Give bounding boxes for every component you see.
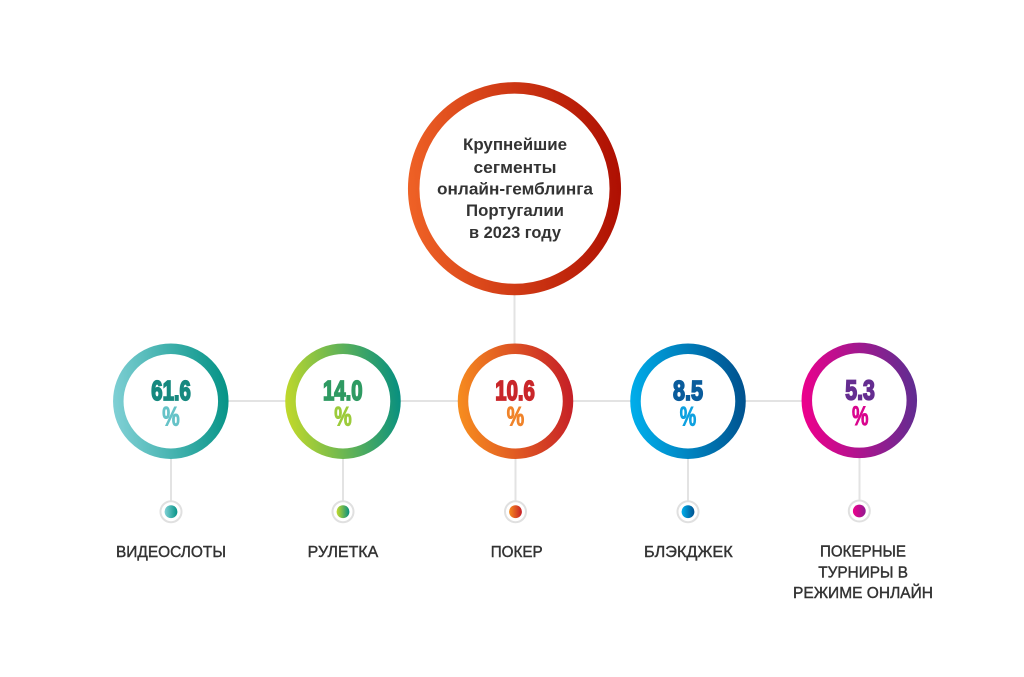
segment: блэкджек [636,349,740,561]
marker dot [678,501,698,522]
segment: покер [463,349,568,561]
label: ВИДЕОСЛОТЫ [116,544,226,561]
percent sign: % [680,402,696,432]
title text: в 2023 году [469,224,562,242]
title text [437,136,594,242]
central title circle [414,88,615,290]
percent sign: % [334,402,352,432]
segment: видеослоты [116,349,226,561]
title text: Крупнейшие [463,136,567,154]
segment: рулетка [290,349,396,561]
marker dot [505,501,526,522]
segment: покерные турниры в режиме онлайн [793,348,933,602]
label: БЛЭКДЖЕК [644,544,733,561]
percent sign: % [852,401,868,431]
label: ТУРНИРЫ В [818,564,908,581]
ring 8.5% [636,349,740,454]
connector lines [170,294,860,501]
label: ПОКЕРНЫЕ [820,544,906,561]
label: РЕЖИМЕ ОНЛАЙН [793,584,933,602]
title text: Португалии [466,202,564,220]
value 61.6: 61.6 [151,375,191,406]
label: РУЛЕТКА [308,544,379,561]
ring 14.0% [290,349,396,454]
label: ПОКЕР [491,544,543,561]
ring 10.6% [463,349,568,454]
ring 61.6% [118,349,223,454]
title text: онлайн-гемблинга [437,180,594,198]
marker dot [160,501,182,522]
marker dot [849,500,870,522]
marker dot [332,501,354,522]
percent sign: % [507,402,524,432]
ring 5.3% [807,348,912,453]
title text: сегменты [474,159,556,177]
percent sign: % [162,402,180,432]
value 10.6: 10.6 [495,375,535,406]
label [793,544,933,602]
value 14.0: 14.0 [323,375,362,406]
value 5.3: 5.3 [845,375,875,406]
value 8.5: 8.5 [673,375,703,406]
